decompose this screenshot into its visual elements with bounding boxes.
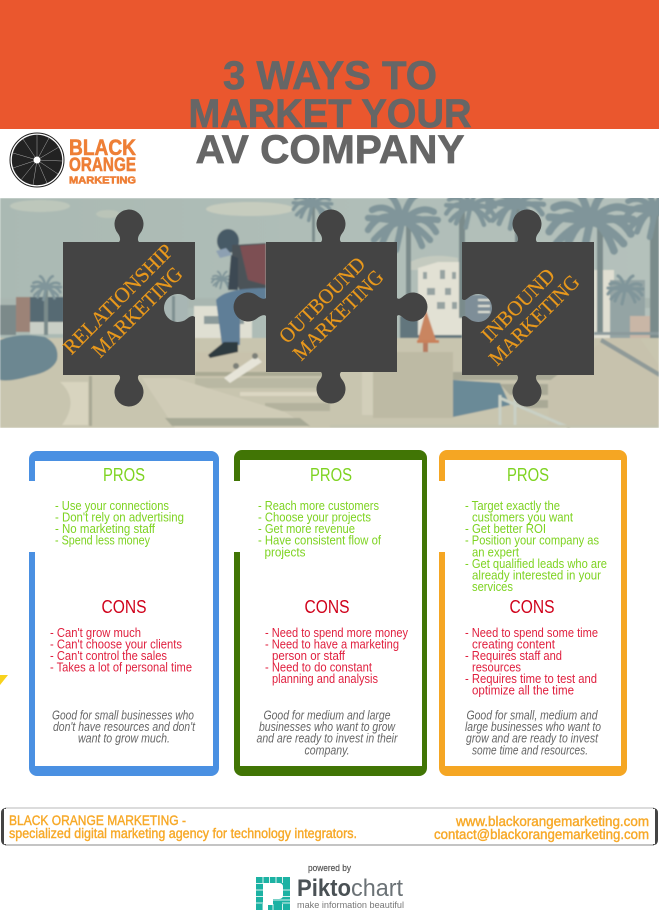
cons list: - Takes a lot of personal time xyxy=(50,659,192,674)
pros list: - Get qualified leads who are xyxy=(465,556,607,571)
pros list: - Have consistent flow of xyxy=(258,533,381,548)
photo: skate park background xyxy=(0,184,659,428)
pros list xyxy=(55,498,184,548)
label: MARKETING xyxy=(484,270,584,370)
summary: businesses who want to grow xyxy=(259,720,396,734)
cons list: - Need to spend some time xyxy=(465,625,598,640)
summary: some time and resources. xyxy=(472,743,588,757)
yellow corner mark xyxy=(0,675,8,685)
logo wordmark xyxy=(69,135,136,186)
pros list: - Spend less money xyxy=(55,533,150,548)
pros list: services xyxy=(472,579,513,594)
skater xyxy=(217,229,239,253)
logo: Black Orange Marketing xyxy=(10,133,136,187)
title: 3 WAYS TO xyxy=(223,54,437,98)
pros list: already interested in your xyxy=(472,568,602,583)
panel: inbound marketing xyxy=(439,450,627,776)
puzzle piece: relationship marketing xyxy=(58,210,195,406)
summary: grow and are ready to invest xyxy=(466,732,598,746)
label: MARKETING xyxy=(87,262,187,362)
pros list: - Choose your projects xyxy=(258,509,371,524)
pros list: - Reach more customers xyxy=(258,498,379,513)
pros list xyxy=(465,498,607,594)
cons list: - Can't grow much xyxy=(50,625,141,640)
header band xyxy=(0,0,659,129)
puzzle piece: inbound marketing xyxy=(462,210,594,406)
cons heading: CONS xyxy=(304,597,350,617)
puzzle piece: outbound marketing xyxy=(234,210,427,403)
icon: orange slice xyxy=(10,133,64,187)
summary: don't have resources and don't xyxy=(53,720,195,734)
logo wordmark: MARKETING xyxy=(69,174,136,186)
company description xyxy=(9,813,357,841)
summary: Good for small businesses who xyxy=(52,708,194,722)
label: MARKETING xyxy=(288,265,388,365)
title: AV COMPANY xyxy=(196,128,465,172)
pros list xyxy=(258,498,381,559)
cons list xyxy=(265,625,408,686)
pros list: - Position your company as xyxy=(465,533,599,548)
label: INBOUND xyxy=(476,263,560,347)
label: RELATIONSHIP xyxy=(58,239,178,359)
cons list: resources xyxy=(472,659,521,674)
cons list: person or staff xyxy=(272,648,345,663)
cons list: - Requires time to test and xyxy=(465,671,597,686)
cons list xyxy=(50,625,192,674)
wordmark xyxy=(297,875,404,910)
summary: Good for medium and large xyxy=(264,708,391,722)
label: OUTBOUND xyxy=(274,252,370,348)
logo wordmark: ORANGE xyxy=(69,154,136,176)
pros list: - No marketing staff xyxy=(55,521,155,536)
icon: Piktochart mark xyxy=(256,877,290,910)
panel: outbound marketing xyxy=(234,450,427,776)
wordmark: Pikto xyxy=(297,875,351,902)
cons heading: CONS xyxy=(510,597,554,617)
pros list: - Target exactly the xyxy=(465,498,560,513)
cons list: - Need to do constant xyxy=(265,659,372,674)
panel: relationship marketing xyxy=(29,451,219,776)
pros heading: PROS xyxy=(310,465,352,485)
cons list: - Need to spend more money xyxy=(265,625,408,640)
summary xyxy=(52,708,195,746)
cons list: - Can't control the sales xyxy=(50,648,167,663)
company description: specialized digital marketing agency for technology integrators. xyxy=(9,826,357,841)
powered by: powered by xyxy=(308,863,351,874)
pros list: customers you want xyxy=(472,509,573,524)
Piktochart credit xyxy=(256,863,404,910)
pros list: an expert xyxy=(472,544,519,559)
logo wordmark: BLACK xyxy=(69,135,136,160)
contact details: contact@blackorangemarketing.com xyxy=(434,827,649,842)
cons list: - Requires staff and xyxy=(465,648,562,663)
title: MARKET YOUR xyxy=(188,92,472,136)
summary: and are ready to invest in their xyxy=(256,732,398,746)
cons list: optimize all the time xyxy=(472,683,574,698)
pros list: - Don't rely on advertising xyxy=(55,509,184,524)
pros list: projects xyxy=(264,544,306,559)
summary: large businesses who want to xyxy=(465,720,601,734)
company description: BLACK ORANGE MARKETING - xyxy=(9,813,186,828)
footer banner xyxy=(1,808,658,845)
cons heading: CONS xyxy=(102,597,146,617)
cons list: planning and analysis xyxy=(272,671,378,686)
pros heading: PROS xyxy=(507,465,549,485)
pros list: - Get more revenue xyxy=(258,521,355,536)
cons list: creating content xyxy=(472,636,555,651)
pros list: - Get better ROI xyxy=(465,521,546,536)
cons list: - Need to have a marketing xyxy=(265,636,399,651)
title xyxy=(188,54,472,172)
contact details: www.blackorangemarketing.com xyxy=(455,814,649,829)
wordmark: chart xyxy=(351,875,403,902)
cons list xyxy=(465,625,598,698)
contact details xyxy=(434,814,649,842)
summary xyxy=(256,708,398,757)
summary: want to grow much. xyxy=(78,732,170,746)
pros heading: PROS xyxy=(103,465,145,485)
pros list: - Use your connections xyxy=(55,498,169,513)
summary xyxy=(465,708,601,757)
summary: company. xyxy=(304,743,350,757)
wordmark: make information beautiful xyxy=(297,900,404,910)
summary: Good for small, medium and xyxy=(466,708,598,722)
cons list: - Can't choose your clients xyxy=(50,636,182,651)
